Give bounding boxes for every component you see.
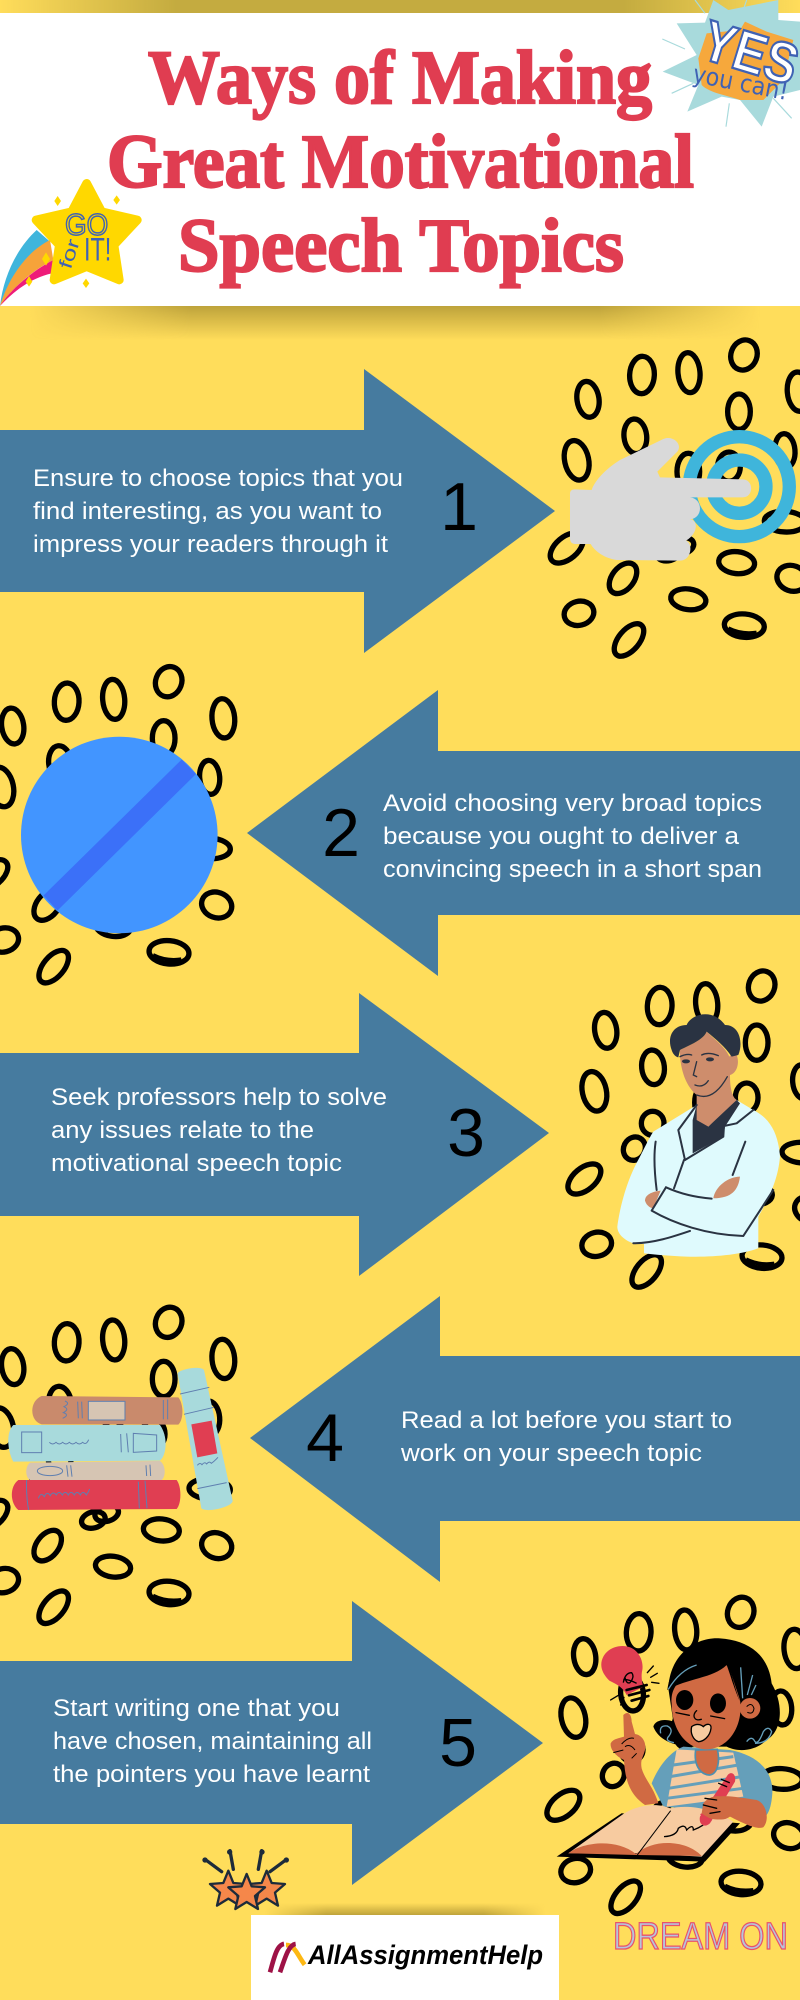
text: step 3: [51, 1084, 387, 1177]
number 2: 2: [322, 795, 360, 871]
title: Ways of Making: [148, 36, 652, 120]
arrow 4: [250, 1296, 800, 1582]
text: step 1: impress your readers through it: [33, 531, 388, 558]
number 1: 1: [440, 469, 478, 545]
brand name: AllAssignmentHelp: [307, 1940, 543, 1970]
icon: go for it star: IT!: [84, 232, 111, 268]
number 5: 5: [439, 1705, 477, 1781]
icon: three stars: [202, 1849, 289, 1909]
doodle ring 5: [541, 1593, 800, 1919]
title: Great Motivational: [107, 120, 694, 204]
doodle ring 1: [545, 336, 800, 661]
number 3: 3: [447, 1095, 485, 1171]
icon: yes you can sticker: [662, 0, 800, 127]
text: step 4: work on your speech topic: [400, 1440, 702, 1467]
arrow 5: [0, 1601, 543, 1885]
text: step 3: motivational speech topic: [51, 1150, 342, 1177]
top shadow strip: [0, 0, 800, 13]
doodle ring 3: [562, 967, 800, 1292]
icon: stack of books: [8, 1368, 233, 1510]
icon: go for it star: GO: [65, 208, 108, 242]
text: step 3: Seek professors help to solve: [51, 1084, 387, 1111]
text: step 1: Ensure to choose topics that you: [33, 465, 403, 492]
icon: go for it star: [0, 183, 137, 306]
arrow 1: [0, 369, 555, 653]
text: step 2: because you ought to deliver a: [383, 823, 740, 850]
icon: man in white coat: [617, 1014, 780, 1257]
text: step 5: have chosen, maintaining all: [53, 1728, 372, 1755]
text: step 2: convincing speech in a short span: [383, 856, 762, 883]
icon: yes you can sticker: you can!: [691, 59, 791, 106]
title: [107, 36, 694, 288]
text: step 2: [383, 790, 762, 883]
shadow above logo: [273, 1904, 537, 1915]
icon: go for it star: for: [54, 236, 84, 271]
doodle ring 4: [0, 1303, 236, 1629]
icon: blue circle with stripe: [21, 737, 218, 933]
text: step 2: Avoid choosing very broad topics: [383, 790, 762, 817]
arrow 3: [0, 993, 549, 1276]
text: step 5: [53, 1695, 372, 1788]
text: step 4: Read a lot before you start to: [401, 1407, 732, 1434]
panel: title header: [0, 13, 800, 306]
doodle ring 2: [0, 663, 236, 988]
icon: hand pointing at target: [570, 437, 789, 561]
text: step 4: [400, 1407, 732, 1467]
panel: logo: [251, 1915, 559, 2000]
text: step 3: any issues relate to the: [51, 1117, 314, 1144]
text: step 1: [33, 465, 403, 558]
arrow 2: [247, 690, 800, 976]
icon: girl writing with lightbulb: [557, 1638, 780, 1862]
shadow under header: [50, 306, 740, 336]
text: step 1: find interesting, as you want to: [33, 498, 382, 525]
number 4: 4: [306, 1400, 344, 1476]
icon: logo mark: [270, 1944, 305, 1972]
title: Speech Topics: [178, 204, 624, 288]
text: step 5: Start writing one that you: [53, 1695, 340, 1722]
text: step 5: the pointers you have learnt: [53, 1761, 370, 1788]
